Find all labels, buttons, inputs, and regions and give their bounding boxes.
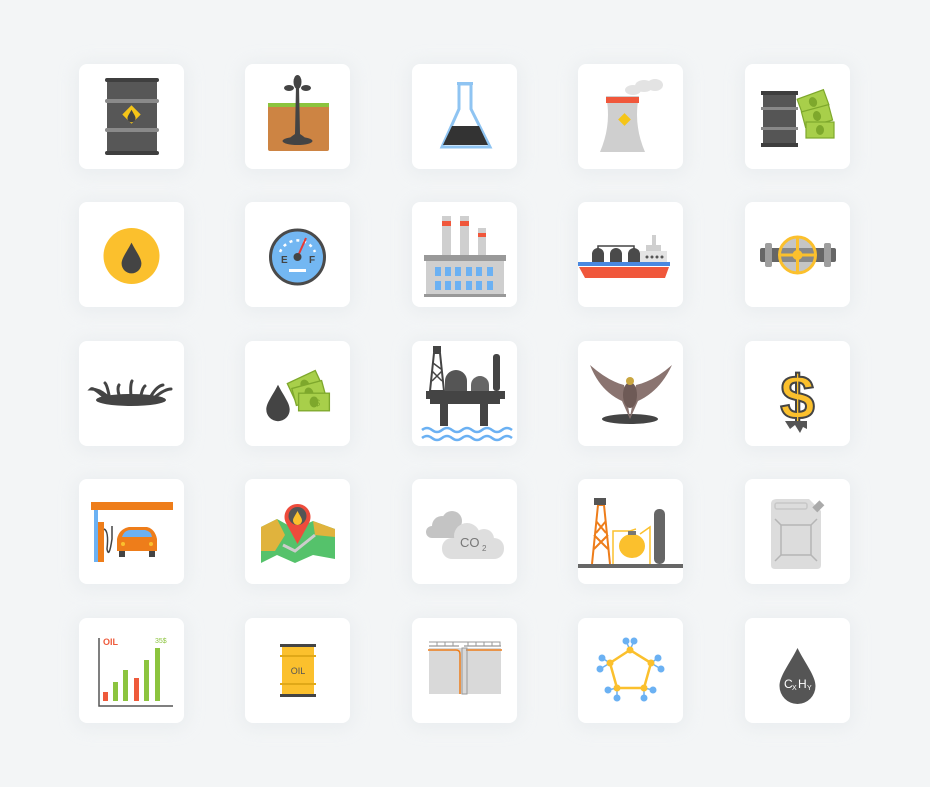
- card: price chart: OIL: [103, 637, 119, 647]
- card: CxHy drop: [741, 616, 854, 729]
- card: pipe valve: [741, 200, 854, 313]
- card: CO2 cloud: 2: [482, 544, 487, 553]
- card: price chart: [75, 616, 188, 729]
- card: oil splash: [75, 339, 188, 452]
- card: oiled eagle: [574, 339, 687, 452]
- card: CO2 cloud: [408, 477, 521, 590]
- card: yellow OIL barrel: [241, 616, 354, 729]
- card: drop and money: $: [315, 398, 320, 408]
- card: oil barrel: [75, 62, 188, 175]
- card: CxHy drop: H: [798, 677, 807, 691]
- card: hydrocarbon molecule: [574, 616, 687, 729]
- card: fuel gauge: E: [281, 255, 288, 266]
- card: yellow OIL barrel: OIL: [291, 666, 305, 676]
- card: dollar sign: [741, 339, 854, 452]
- card: CxHy drop: Y: [807, 685, 812, 692]
- card: CxHy drop: C: [784, 677, 793, 691]
- card: fuel gauge: [241, 200, 354, 313]
- card: oil gusher: [241, 62, 354, 175]
- card: CxHy drop: X: [792, 685, 797, 692]
- card: tanker ship: [574, 200, 687, 313]
- card: cooling tower: [574, 62, 687, 175]
- card: CO2 cloud: CO: [460, 535, 480, 550]
- card: gas station: [75, 477, 188, 590]
- card: flask: [408, 62, 521, 175]
- card: refinery: [574, 477, 687, 590]
- card: jerrycan: [741, 477, 854, 590]
- card: yellow drop badge: [75, 200, 188, 313]
- card: price chart: 35$: [155, 638, 167, 645]
- card: map pin: [241, 477, 354, 590]
- card: offshore platform: [408, 339, 521, 452]
- card: storage tanks: [408, 616, 521, 729]
- card: drop and money: [241, 339, 354, 452]
- card: factory: [408, 200, 521, 313]
- card: barrel and money: [741, 62, 854, 175]
- card: fuel gauge: F: [309, 255, 315, 266]
- card: dollar sign: $: [780, 364, 815, 433]
